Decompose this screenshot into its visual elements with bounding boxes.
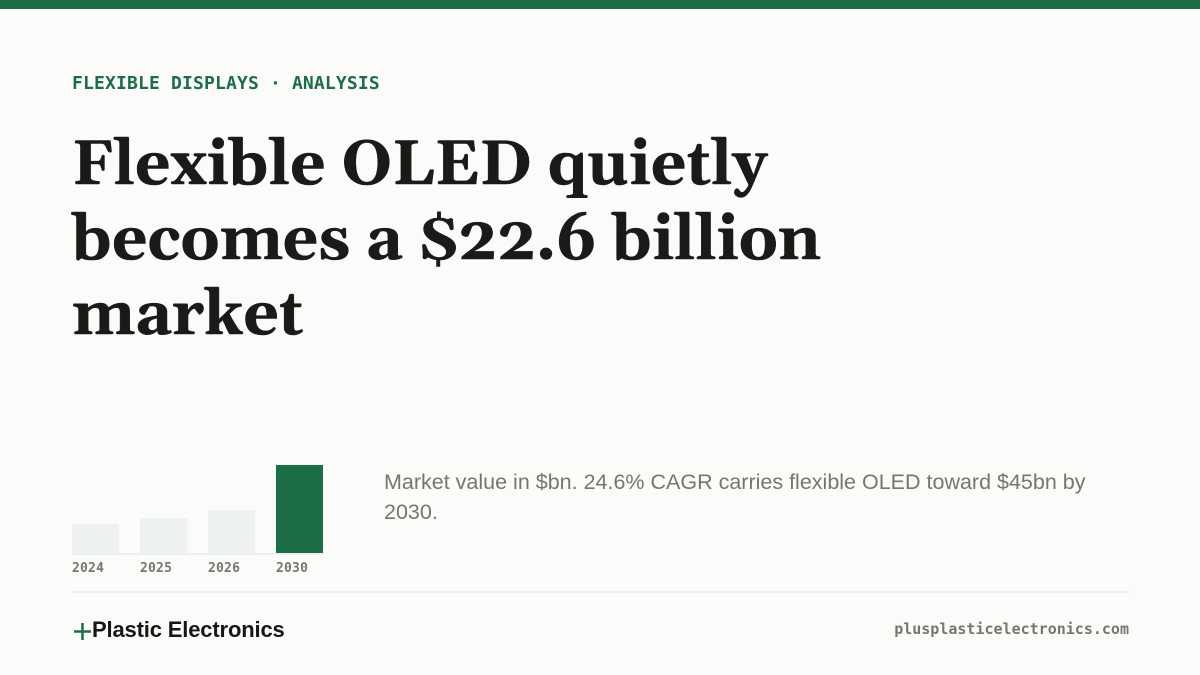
chart baseline [72, 553, 323, 555]
bar: 2025 [140, 518, 187, 553]
bar: 2024 [72, 524, 119, 553]
footer divider [72, 591, 1129, 593]
bar: 2026 [208, 510, 255, 553]
title: Flexible OLED quietly becomes a $22.6 billion market [72, 127, 821, 356]
year label 2030: 2030 [276, 561, 308, 576]
year label 2025: 2025 [140, 561, 172, 576]
bar chart [72, 465, 323, 576]
brand logo [74, 617, 285, 642]
year label 2026: 2026 [208, 561, 240, 576]
top accent bar [0, 0, 1200, 9]
year label 2024: 2024 [72, 561, 104, 576]
brand name: Plastic Electronics [92, 617, 285, 642]
eyebrow label: FLEXIBLE DISPLAYS · ANALYSIS [72, 73, 380, 94]
website url: plusplasticelectronics.com [894, 620, 1129, 638]
bar: 2030 [276, 465, 323, 553]
chart caption: Market value in $bn. 24.6% CAGR carries flexible OLED toward $45bn by 2030. [384, 470, 1085, 524]
icon: plus mark [74, 623, 91, 640]
